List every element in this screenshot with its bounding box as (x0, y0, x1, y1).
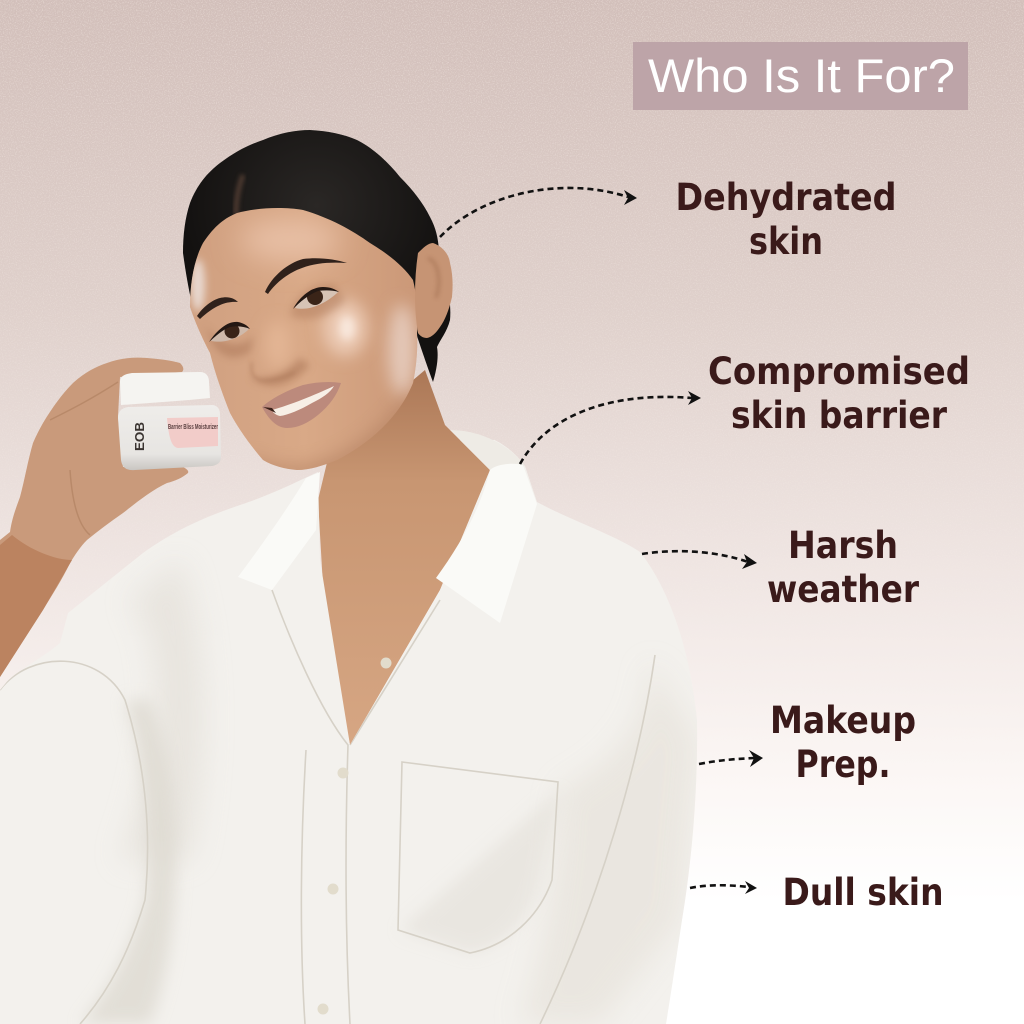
label: Compromised (708, 350, 970, 393)
white linen shirt (0, 430, 720, 1024)
jar product name: Barrier Bliss Moisturizer (168, 424, 218, 431)
face (190, 208, 418, 470)
callout: harsh weather (642, 524, 920, 611)
label (767, 524, 920, 611)
arrow (690, 881, 757, 894)
label: Dull skin (782, 871, 944, 914)
ear shading (428, 258, 439, 298)
hand and arm (0, 358, 188, 677)
left eyebrow (197, 297, 238, 319)
label: Harsh (788, 524, 898, 567)
jar body (118, 405, 221, 470)
shirt buttons (318, 658, 392, 1014)
arrow (699, 750, 763, 767)
arrow (642, 551, 757, 569)
label: skin (749, 220, 823, 263)
portrait of woman holding jar (0, 130, 720, 1024)
nose (251, 362, 295, 381)
jar lid (120, 372, 210, 405)
back collar (450, 430, 492, 440)
label (770, 699, 916, 786)
collar right (436, 464, 537, 623)
right eyebrow (265, 258, 347, 294)
callout: makeup prep (699, 699, 916, 786)
title badge (633, 42, 968, 110)
label: Dehydrated (676, 176, 896, 219)
label (676, 176, 896, 263)
label: Prep. (796, 743, 890, 786)
label (708, 350, 970, 437)
callout: dull skin (690, 871, 944, 914)
label: Makeup (770, 699, 916, 742)
arrow (520, 391, 701, 464)
right eye (293, 287, 339, 309)
title badge: Who Is It For? (648, 49, 955, 102)
fold lines (0, 590, 655, 1024)
neck and chest (318, 370, 490, 745)
jar label (167, 417, 218, 448)
callout: dehydrated skin (440, 176, 896, 263)
mouth (262, 382, 341, 428)
label: weather (767, 568, 920, 611)
left eye (209, 322, 250, 342)
jar brand: EOB (132, 422, 147, 451)
hair (183, 130, 450, 382)
arrow (440, 188, 637, 237)
callout: compromised skin barrier (520, 350, 970, 464)
label: skin barrier (731, 394, 948, 437)
product jar (118, 372, 221, 470)
ear (415, 243, 453, 338)
collar left (238, 472, 320, 590)
hair parting (236, 175, 243, 215)
